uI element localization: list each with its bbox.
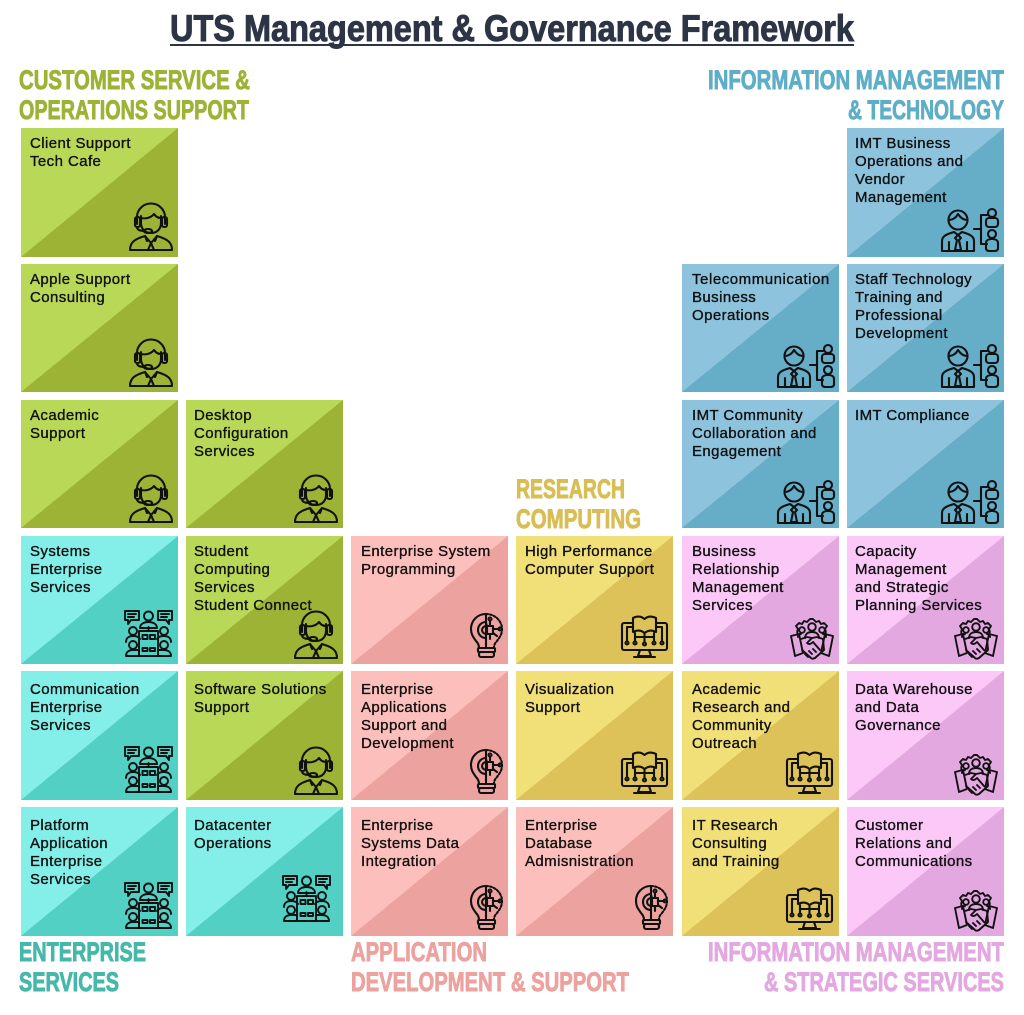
title: UTS Management & Governance Framework <box>170 8 854 49</box>
tile: Student Computing Services Student Connect: Student Connect <box>194 597 312 614</box>
tile: IMT Community Collaboration and Engagement: Collaboration and <box>692 425 817 442</box>
tile: Staff Technology Training and Professional Development <box>847 264 1004 392</box>
tile: Client Support Tech Cafe <box>21 128 178 257</box>
heading: application development and support <box>351 937 629 997</box>
heading: customer service and operations support: CUSTOMER SERVICE & <box>19 65 250 95</box>
tile: Apple Support Consulting <box>21 264 178 392</box>
tile: Academic Research and Community Outreach: Research and <box>692 699 790 716</box>
tile: IMT Community Collaboration and Engagement: IMT Community <box>692 407 803 424</box>
tile: Capacity Management and Strategic Planning Services: and Strategic <box>855 579 949 596</box>
heading: research computing: COMPUTING <box>516 504 641 534</box>
tile: IT Research Consulting and Training: and Training <box>692 853 780 870</box>
tile: Telecommunication Business Operations: Telecommunication <box>692 271 830 288</box>
tile: Academic Research and Community Outreach: Outreach <box>692 735 757 752</box>
tile: Business Relationship Management Services: Services <box>692 597 753 614</box>
tile: Academic Support <box>21 400 178 528</box>
tile: Data Warehouse and Data Governance: Governance <box>855 717 941 734</box>
tile: Visualization Support <box>516 671 673 800</box>
tile: Data Warehouse and Data Governance: Data Warehouse <box>855 681 973 698</box>
tile: Capacity Management and Strategic Planning Services: Planning Services <box>855 597 982 614</box>
heading: customer service and operations support: OPERATIONS SUPPORT <box>19 95 249 125</box>
tile: Enterprise Systems Data Integration: Systems Data <box>361 835 460 852</box>
tile: Systems Enterprise Services: Systems <box>30 543 90 560</box>
tile: Enterprise System Programming <box>351 536 508 664</box>
tile: Enterprise System Programming: Enterprise System <box>361 543 491 560</box>
tile: IMT Community Collaboration and Engagement: Engagement <box>692 443 782 460</box>
heading: enterprise services: SERVICES <box>19 967 119 997</box>
tile: IMT Business Operations and Vendor Management: Operations and <box>855 153 963 170</box>
tile: Student Computing Services Student Connect: Services <box>194 579 255 596</box>
tile: Business Relationship Management Services: Management <box>692 579 784 596</box>
tile: Customer Relations and Communications: Communications <box>855 853 973 870</box>
tile: Platform Application Enterprise Services: Services <box>30 871 91 888</box>
tile: Platform Application Enterprise Services: Platform <box>30 817 89 834</box>
tile: High Performance Computer Support <box>516 536 673 664</box>
tile: Enterprise Database Admisnistration <box>516 807 673 936</box>
tile: Client Support Tech Cafe: Tech Cafe <box>30 153 101 170</box>
tile: Visualization Support: Support <box>525 699 581 716</box>
tile: Customer Relations and Communications <box>847 807 1004 936</box>
tile: Datacenter Operations <box>186 807 343 936</box>
tile: Student Computing Services Student Connect: Student <box>194 543 249 560</box>
tile: Telecommunication Business Operations <box>682 264 839 392</box>
tile: Platform Application Enterprise Services: Application <box>30 835 108 852</box>
tile: IT Research Consulting and Training: Consulting <box>692 835 767 852</box>
tile: Customer Relations and Communications: Customer <box>855 817 923 834</box>
tile: Datacenter Operations: Datacenter <box>194 817 272 834</box>
heading: customer service and operations support <box>19 65 250 125</box>
heading: application development and support: DEVELOPMENT & SUPPORT <box>351 967 629 997</box>
tile: IMT Community Collaboration and Engagement <box>682 400 839 528</box>
heading: information management and strategic services <box>708 937 1004 997</box>
tile: Apple Support Consulting: Consulting <box>30 289 105 306</box>
tile: High Performance Computer Support: Computer Support <box>525 561 655 578</box>
tile: IT Research Consulting and Training: IT Research <box>692 817 778 834</box>
tile: Academic Support: Academic <box>30 407 99 424</box>
tile: Staff Technology Training and Professional Development: Training and <box>855 289 943 306</box>
tile: Data Warehouse and Data Governance: and Data <box>855 699 919 716</box>
tile: Systems Enterprise Services: Enterprise <box>30 561 103 578</box>
tile: Enterprise Systems Data Integration: Integration <box>361 853 437 870</box>
tile: Business Relationship Management Services: Business <box>692 543 756 560</box>
tile: Enterprise Database Admisnistration: Enterprise <box>525 817 598 834</box>
tile: Systems Enterprise Services <box>21 536 178 664</box>
tile: Staff Technology Training and Professional Development: Professional <box>855 307 943 324</box>
tile: Telecommunication Business Operations: Business <box>692 289 756 306</box>
tile: Enterprise System Programming: Programming <box>361 561 456 578</box>
tile: IMT Business Operations and Vendor Management: IMT Business <box>855 135 951 152</box>
tile: Enterprise Systems Data Integration: Enterprise <box>361 817 434 834</box>
heading: information management and technology <box>708 65 1004 125</box>
heading: research computing: RESEARCH <box>516 474 625 504</box>
tile: Capacity Management and Strategic Planning Services: Capacity <box>855 543 917 560</box>
tile: Visualization Support: Visualization <box>525 681 614 698</box>
tile: Enterprise Applications Support and Development: Enterprise <box>361 681 434 698</box>
tile: Software Solutions Support: Support <box>194 699 250 716</box>
tile: Communication Enterprise Services: Enterprise <box>30 699 103 716</box>
tile: Student Computing Services Student Connect <box>186 536 343 664</box>
tile: Desktop Configuration Services: Desktop <box>194 407 252 424</box>
tile: Software Solutions Support: Software Solutions <box>194 681 327 698</box>
tile: Enterprise Applications Support and Development: Support and <box>361 717 447 734</box>
tile: Enterprise Applications Support and Development: Development <box>361 735 454 752</box>
tile: Business Relationship Management Services <box>682 536 839 664</box>
tile: High Performance Computer Support: High Performance <box>525 543 653 560</box>
tile: IMT Business Operations and Vendor Management <box>847 128 1004 257</box>
heading: enterprise services: ENTERPRISE <box>19 937 146 967</box>
tile: IMT Business Operations and Vendor Management: Management <box>855 189 947 206</box>
tile: Systems Enterprise Services: Services <box>30 579 91 596</box>
tile: Platform Application Enterprise Services <box>21 807 178 936</box>
tile: Customer Relations and Communications: Relations and <box>855 835 952 852</box>
tile: Platform Application Enterprise Services: Enterprise <box>30 853 103 870</box>
tile: Communication Enterprise Services: Communication <box>30 681 140 698</box>
tile: Desktop Configuration Services: Services <box>194 443 255 460</box>
tile: Enterprise Database Admisnistration: Database <box>525 835 593 852</box>
tile: Apple Support Consulting: Apple Support <box>30 271 131 288</box>
tile: IT Research Consulting and Training <box>682 807 839 936</box>
tile: Staff Technology Training and Professional Development: Development <box>855 325 948 342</box>
tile: Datacenter Operations: Operations <box>194 835 272 852</box>
tile: Enterprise Database Admisnistration: Admisnistration <box>525 853 634 870</box>
tile: Desktop Configuration Services <box>186 400 343 528</box>
tile: Enterprise Systems Data Integration <box>351 807 508 936</box>
tile: Enterprise Applications Support and Development: Applications <box>361 699 447 716</box>
heading: enterprise services <box>19 937 146 997</box>
heading: application development and support: APPLICATION <box>351 937 487 967</box>
tile: IMT Business Operations and Vendor Management: Vendor <box>855 171 905 188</box>
tile: Desktop Configuration Services: Configuration <box>194 425 289 442</box>
tile: Academic Support: Support <box>30 425 86 442</box>
tile: Student Computing Services Student Connect: Computing <box>194 561 270 578</box>
tile: Academic Research and Community Outreach: Community <box>692 717 772 734</box>
tile: Academic Research and Community Outreach <box>682 671 839 800</box>
tile: Academic Research and Community Outreach: Academic <box>692 681 761 698</box>
tile: Data Warehouse and Data Governance <box>847 671 1004 800</box>
tile: Communication Enterprise Services <box>21 671 178 800</box>
tile: Software Solutions Support <box>186 671 343 800</box>
tile: Capacity Management and Strategic Planning Services: Management <box>855 561 947 578</box>
tile: Staff Technology Training and Professional Development: Staff Technology <box>855 271 972 288</box>
heading: research computing <box>516 474 641 534</box>
tile: Enterprise Applications Support and Development <box>351 671 508 800</box>
tile: Telecommunication Business Operations: Operations <box>692 307 770 324</box>
tile: IMT Compliance: IMT Compliance <box>855 407 970 424</box>
tile: IMT Compliance <box>847 400 1004 528</box>
tile: Business Relationship Management Services: Relationship <box>692 561 780 578</box>
tile: Client Support Tech Cafe: Client Support <box>30 135 131 152</box>
tile: Communication Enterprise Services: Services <box>30 717 91 734</box>
tile: Capacity Management and Strategic Planning Services <box>847 536 1004 664</box>
